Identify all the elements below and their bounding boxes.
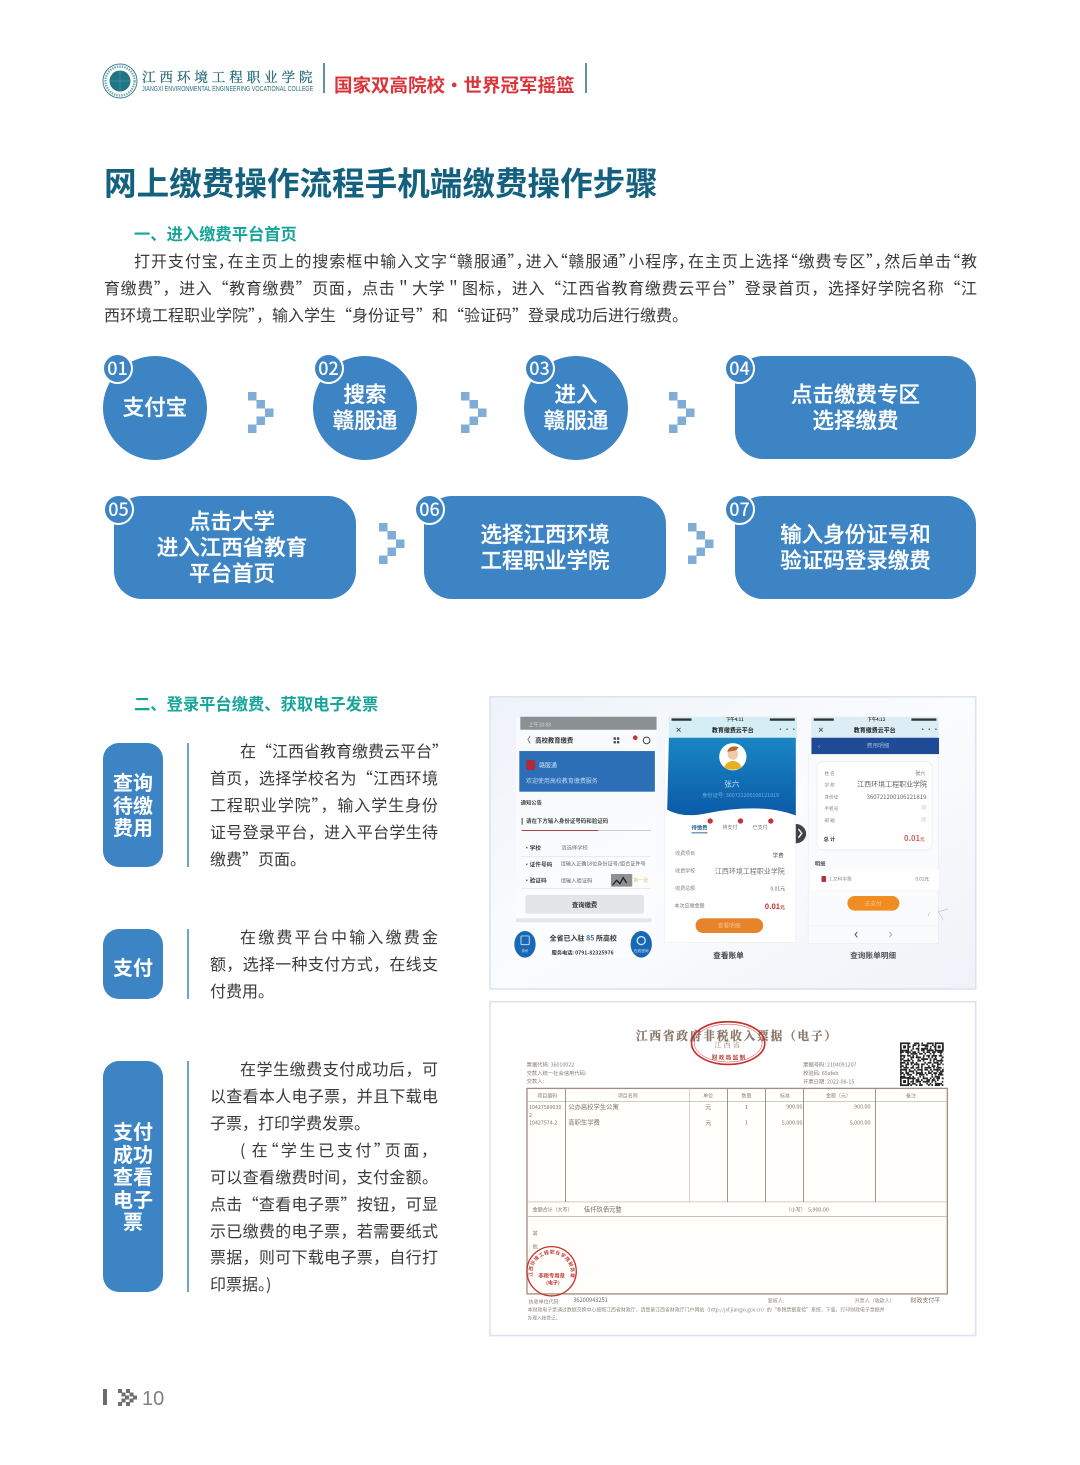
text block: query fees: 缴费”页面。: [210, 846, 306, 870]
step 04: 点击缴费专区: [791, 378, 920, 408]
phone screen 3: 查询账单明细: [850, 950, 896, 961]
invoice table: 5,900.00: [808, 1206, 829, 1214]
text block: view e-invoice: 以查看本人电子票，并且下载电: [210, 1083, 438, 1107]
phone screen 3: 教育缴费云平台: [854, 725, 896, 734]
invoice table: 其: [533, 1230, 538, 1237]
phone screen 2: 张六: [724, 779, 740, 790]
step 06: [416, 496, 666, 599]
phone screen 3: 姓 名: [824, 770, 835, 777]
invoice meta right: [803, 1060, 857, 1085]
divider left: [323, 63, 325, 93]
phone screen 3: 总 计: [823, 835, 836, 843]
invoice table: 元: [705, 1118, 711, 1127]
phone screen 1: 查询缴费: [572, 900, 598, 909]
invoice table: 他: [533, 1243, 538, 1250]
invoice footer notes: 复核人:: [768, 1298, 785, 1305]
step 07: 验证码登录缴费: [780, 544, 931, 574]
text block: query fees: 在“江西省教育缴费云平台”: [240, 738, 448, 762]
phone screen 3: ···: [919, 724, 939, 734]
step 06: 06: [419, 496, 440, 522]
phone screen 3: 明细: [815, 859, 825, 867]
invoice table: 10427589030: [529, 1103, 561, 1111]
footer: page number: [103, 1388, 164, 1410]
phone screen 2: 学费: [772, 850, 784, 859]
invoice table: 数量: [742, 1092, 751, 1099]
phone screen 1: •学校: [524, 843, 541, 852]
step 04: 选择缴费: [812, 404, 898, 434]
step 02: 02: [318, 355, 339, 381]
tab: query fees: 费用: [113, 812, 153, 841]
invoice title: 江西省政府非税收入票据（电子）: [636, 1028, 838, 1044]
phone screen 1: 高校教育缴费: [535, 736, 574, 745]
text block: pay: [210, 924, 438, 1002]
step 01: [103, 355, 207, 460]
invoice table: 900.00: [786, 1103, 802, 1111]
invoice table: 元: [705, 1102, 711, 1111]
step 05: 点击大学: [189, 504, 275, 536]
invoice footer notes: 执收单位代码:: [529, 1299, 561, 1306]
invoice footer notes: [528, 1295, 940, 1322]
phone screen 3: 邮 箱: [824, 817, 835, 824]
text block: query fees: 证号登录平台，进入平台学生待: [210, 819, 438, 843]
phone screen 2: 江西环境工程职业学院: [715, 866, 785, 876]
step 07: 07: [729, 496, 750, 522]
divider right: [585, 63, 587, 93]
step 05: 平台首页: [189, 556, 275, 588]
step 02: 赣服通: [333, 404, 397, 435]
invoice table: 2: [529, 1111, 532, 1119]
text block: pay: 额，选择一种支付方式，在线支: [210, 951, 438, 975]
phone screen 2: 已支付: [753, 824, 768, 831]
text block: view e-invoice: 可以查看缴费时间，支付金额。: [210, 1164, 438, 1188]
tab: view e-invoice: 查看: [113, 1161, 153, 1190]
phone screen 2: ···: [777, 724, 797, 734]
invoice meta left: 票据代码: 36010022: [527, 1060, 574, 1068]
phone screen 3: 0.01元: [904, 833, 925, 844]
phone screen 1: 请输入验证码: [561, 876, 592, 884]
phone screen 3: 学 校: [824, 782, 835, 789]
intro text block: 打开支付宝，在主页上的搜索框中输入文字“赣服通”，进入“赣服通”小程序，在主页上选择“缴费专区”，然后单击“教: [134, 248, 977, 272]
tab: pay: [103, 929, 163, 999]
phone screen 2: 待缴费: [692, 823, 708, 831]
phone screen 2: 0.01元: [765, 902, 785, 912]
stamp: round college seal: 非税专用章: [538, 1271, 566, 1279]
step 03: 赣服通: [544, 404, 608, 435]
phone screen 1: •证件号码: [524, 859, 553, 868]
text block: view e-invoice: 在学生缴费支付成功后，可: [240, 1056, 438, 1080]
text block: view e-invoice: 票据，则可下载电子票，自行打: [210, 1244, 438, 1268]
phone screen 3: 手机号: [824, 805, 839, 812]
intro text block: 西环境工程职业学院”，输入学生“身份证号”和“验证码”登录成功后进行缴费。: [104, 302, 688, 326]
invoice table: 1: [745, 1103, 748, 1111]
phone screen 1: 在线咨询: [634, 948, 649, 954]
text block: view e-invoice: 印票据。): [210, 1271, 271, 1295]
QR code: [900, 1042, 944, 1086]
invoice table: 项目名称: [618, 1092, 638, 1099]
invoice table: 公办高校学生公寓: [568, 1102, 619, 1111]
step 01: 支付宝: [123, 391, 187, 422]
invoice table: 10427574-2: [529, 1119, 557, 1127]
phone screen 2: 查看账单: [713, 950, 744, 961]
step 06: 选择江西环境: [480, 518, 610, 548]
phone screen 2: 收费总额: [675, 885, 695, 892]
phone screen 3: 1.文科学费: [829, 876, 852, 883]
invoice table: 1: [745, 1119, 748, 1127]
tab: view e-invoice: 电子: [113, 1184, 153, 1213]
tab: view e-invoice: 成功: [113, 1139, 153, 1168]
tab: view e-invoice: 支付: [113, 1116, 153, 1145]
tab: query fees: [103, 743, 163, 867]
phone screen 1: •验证码: [524, 876, 547, 885]
step 02: [313, 355, 417, 460]
phone screen 2: 教育缴费云平台: [712, 725, 754, 734]
phone screen 3: 下午4:12: [868, 716, 886, 723]
arrow 3: [669, 392, 694, 433]
stamp: finance oval seal: 财政局监制: [712, 1052, 747, 1061]
invoice meta left: 交款人:: [527, 1077, 545, 1085]
step 04: [726, 355, 976, 459]
stamp: round college seal: (电子): [546, 1280, 560, 1287]
intro text block: [104, 248, 977, 326]
icon: college emblem: [102, 64, 138, 98]
arrow 2: [461, 392, 486, 433]
invoice meta left: [527, 1060, 587, 1085]
invoice table: 单位: [703, 1092, 713, 1099]
text block: query fees: 首页，选择学校名为“江西环境: [210, 765, 438, 789]
invoice table: [527, 1088, 947, 1294]
tab: pay: 支付: [113, 952, 153, 981]
phone screen 3: 360721200106121819: [867, 792, 926, 801]
phone screen 2: 下午4:11: [726, 716, 744, 723]
text block: view e-invoice: 子票，打印学费发票。: [210, 1110, 370, 1134]
step 07: 输入身份证号和: [780, 518, 931, 548]
slogan: 国家双高院校·世界冠军摇篮: [334, 72, 575, 98]
arrow 5: [688, 523, 714, 564]
phone screen 2: 收费项目: [675, 850, 695, 857]
step 03: [524, 355, 628, 460]
phone screen 1: 换一张: [633, 877, 648, 884]
invoice table: 金额合计（大写）: [533, 1206, 573, 1213]
phone screen 1: 全省已入驻 85 所高校: [550, 933, 617, 943]
invoice footer notes: 开票人（收款人）: [855, 1298, 895, 1305]
phone screen 1: 评价: [521, 948, 529, 954]
header: college logo and slogan: [102, 63, 587, 98]
stamp: round college seal: [526, 1246, 577, 1297]
step 03: 03: [529, 355, 550, 381]
step 05: [105, 496, 356, 599]
arrow 1: [248, 392, 274, 433]
tab: view e-invoice: [103, 1061, 163, 1292]
step 07: [726, 496, 976, 599]
divider: query fees: [187, 743, 189, 867]
phone screen 2: [664, 716, 806, 961]
heading: section two: 二、登录平台缴费、获取电子发票: [134, 691, 378, 715]
invoice footer notes: 财政支付平: [910, 1296, 940, 1305]
phone screen 1: 欢迎使用高校教育缴费服务: [526, 776, 598, 785]
title: 网上缴费操作流程手机端缴费操作步骤: [104, 158, 658, 205]
step 06: 工程职业学院: [480, 544, 610, 574]
phone screen 2: 0.01元: [770, 886, 785, 893]
phone screen 3: 江西环境工程职业学院: [857, 780, 927, 790]
divider: pay: [187, 929, 189, 999]
divider: view e-invoice: [187, 1061, 189, 1292]
tab: query fees: 查询: [113, 767, 153, 796]
phone screen 2: 本次应缴金额: [675, 903, 704, 910]
invoice table: 标准: [780, 1092, 790, 1099]
phone screen 3: 费用明细: [867, 741, 890, 750]
invoice table: （小写）: [786, 1206, 806, 1213]
invoice table: 金额（元）: [826, 1092, 851, 1099]
invoice table: 高职生学费: [568, 1118, 600, 1127]
invoice table: 5,000.00: [782, 1118, 802, 1126]
phone screen 1: 请输入正确18位身份证号/组合证件号: [561, 860, 646, 868]
invoice table: 5,000.00: [850, 1118, 870, 1126]
invoice footer notes: 办理入账登记。: [528, 1315, 560, 1322]
step 05: 进入江西省教育: [157, 530, 307, 562]
invoice footer notes: 本财政电子票通过数据交换中心按照江西省财政厅，请登录江西省财政厅门户网站（http://jxf.jiangxi.gov.cn）的“非税票据查验”系统，下载，打印财政电子票据并: [528, 1307, 885, 1314]
invoice meta left: 交款人统一社会信用代码:: [527, 1069, 587, 1077]
phone screen 1: 上午10:08: [529, 722, 551, 729]
invoice table: 900.00: [854, 1103, 870, 1111]
college English name: JIANGXI ENVIRONMENTAL ENGINEERING VOCATIONAL COLLEGE: [142, 85, 313, 93]
phone screen 3: ✕: [818, 726, 824, 736]
phone screen 2: 待支付: [722, 824, 737, 831]
text block: view e-invoice: 点击“查看电子票”按钮，可显: [210, 1191, 438, 1215]
text block: view e-invoice: ( 在“学生已支付”页面，: [240, 1137, 430, 1161]
arrow 4: [379, 523, 404, 564]
phone screen 2: 查看明细: [718, 921, 741, 930]
invoice meta right: 票据号码: 2104091207: [803, 1060, 857, 1068]
step 05: 05: [108, 496, 129, 522]
phone screen 1: 请选择学校: [561, 844, 589, 852]
text block: view e-invoice: [210, 1056, 438, 1295]
tab: view e-invoice: 票: [123, 1206, 143, 1235]
phone screen 3: 0.01元: [915, 876, 929, 882]
step 03: 进入: [554, 378, 598, 409]
phone screen 3: 身份证: [824, 793, 839, 800]
phone screen 2: 身份证号: 360721200106121819: [702, 791, 779, 799]
stamp: finance oval seal: 江西省: [714, 1041, 742, 1051]
college Chinese name: 江西环境工程职业学院: [142, 66, 316, 86]
step 04: 04: [729, 355, 750, 381]
text block: pay: 付费用。: [210, 978, 274, 1002]
page number: 10: [142, 1388, 164, 1410]
phone screen 2: ✕: [675, 726, 682, 736]
phone screen 1: 赣服通: [539, 761, 557, 770]
phone screen 1: [514, 717, 657, 958]
phone screen 3: ‹: [818, 741, 820, 751]
phone screen 1: 服务电话: 0791-82325976: [552, 949, 614, 957]
step 02: 搜索: [343, 378, 386, 409]
icon: double chevron: [118, 1389, 137, 1406]
intro text block: 育缴费”，进入“教育缴费”页面，点击＂大学＂图标，进入“江西省教育缴费云平台”登录首页，选择好学院名称“江: [104, 275, 977, 299]
phone screen 2: 收费学校: [675, 867, 695, 874]
step 01: 01: [107, 355, 128, 381]
text block: pay: 在缴费平台中输入缴费金: [240, 924, 438, 948]
stamp: round college seal: 江西环境工程职业学院财务章: [528, 1250, 575, 1278]
phone screen 1: 请在下方输入身份证号码和验证码: [526, 817, 609, 825]
tab: query fees: 待缴: [113, 790, 153, 819]
phone screen 1: 通知公告: [521, 799, 542, 807]
text block: view e-invoice: 示已缴费的电子票，若需要纸式: [210, 1218, 438, 1242]
panel: phone screenshots: [489, 696, 976, 990]
invoice table: 备注: [906, 1092, 916, 1099]
stamp: finance oval seal: [692, 1022, 765, 1064]
invoice table: 项目编码: [537, 1092, 557, 1099]
page marker bar: [103, 1389, 107, 1405]
invoice footer notes: 36200943251: [573, 1295, 608, 1304]
heading: section one: 一、进入缴费平台首页: [134, 221, 297, 245]
invoice meta right: 开票日期: 2022-08-15: [803, 1077, 854, 1085]
invoice table: 伍仟玖佰元整: [584, 1205, 622, 1214]
phone screen 3: 张六: [915, 770, 925, 777]
invoice meta right: 校验码: 65afeb: [803, 1069, 839, 1077]
panel: electronic invoice: [489, 1001, 976, 1336]
phone screen 3: 去支付: [865, 899, 882, 908]
text block: query fees: [210, 738, 448, 870]
phone screen 1: 〈: [523, 734, 531, 746]
phone screen 3: [808, 716, 948, 961]
text block: query fees: 工程职业学院”，输入学生身份: [210, 792, 438, 816]
